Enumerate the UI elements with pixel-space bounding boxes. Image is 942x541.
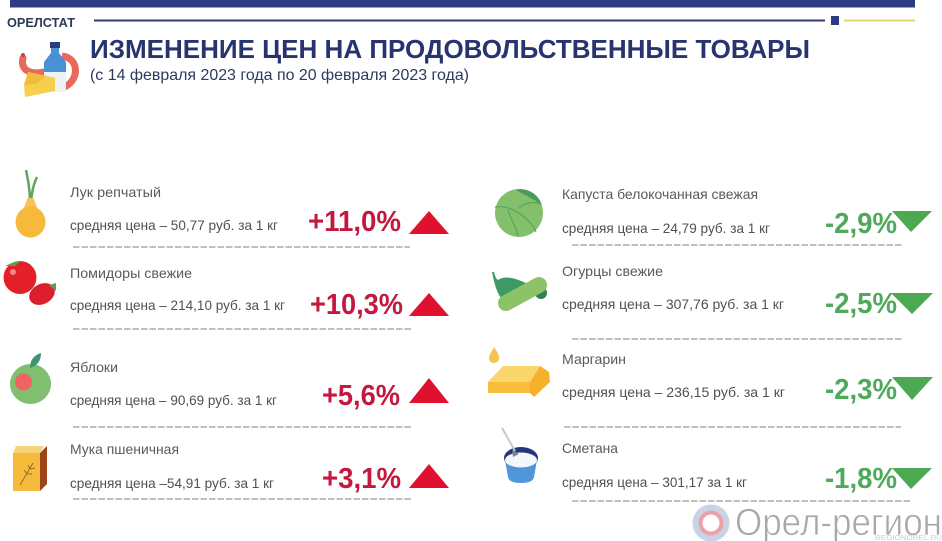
item: sour cream: [502, 428, 932, 501]
item: flour: [13, 441, 449, 499]
item: flour: +3,1%: [322, 463, 401, 495]
item: margarine: -2,3%: [825, 374, 897, 406]
arrow: down: [892, 468, 932, 489]
item: margarine: [488, 347, 933, 427]
arrow: down: [891, 293, 933, 314]
icon: food basket: [21, 42, 76, 97]
item: tomatoes: [4, 261, 449, 329]
item: onion: +11,0%: [308, 206, 401, 238]
icon: sour cream: [502, 428, 538, 483]
arrow: down: [892, 211, 932, 232]
item: cabbage: [495, 186, 932, 245]
item: flour: Мука пшеничная: [70, 441, 179, 457]
item: onion: [16, 170, 449, 247]
item: tomatoes: +10,3%: [310, 289, 403, 321]
item: sour cream: -1,8%: [825, 463, 897, 495]
item: tomatoes: Помидоры свежие: [70, 265, 192, 281]
icon: margarine: [488, 347, 550, 397]
item: margarine: средняя цена – 236,15 руб. за 1 кг: [562, 384, 785, 400]
icon: apple: [10, 353, 51, 404]
item: apples: средняя цена – 90,69 руб. за 1 кг: [70, 392, 277, 408]
item: sour cream: Сметана: [562, 440, 618, 456]
arrow: down: [892, 377, 933, 400]
icon: cucumbers: [492, 272, 547, 303]
icon: onion: [16, 170, 46, 238]
item: margarine: Маргарин: [562, 351, 626, 367]
icon: flour bag: [13, 446, 47, 491]
item: cabbage: -2,9%: [825, 208, 897, 240]
item: onion: Лук репчатый: [70, 184, 161, 200]
header band: [10, 0, 915, 8]
arrow: up: [409, 211, 449, 234]
item: cucumbers: средняя цена – 307,76 руб. за 1 кг: [562, 296, 784, 312]
item: cabbage: средняя цена – 24,79 руб. за 1 кг: [562, 220, 770, 236]
item: onion: средняя цена – 50,77 руб. за 1 кг: [70, 217, 278, 233]
item: cucumbers: [492, 263, 933, 339]
item: apples: +5,6%: [322, 380, 400, 412]
item: apples: Яблоки: [70, 359, 118, 375]
item: cucumbers: Огурцы свежие: [562, 263, 663, 279]
item: apples: [10, 353, 449, 427]
arrow: up: [409, 293, 449, 316]
header rule: [94, 16, 915, 25]
icon: watermark logo: [692, 504, 730, 541]
arrow: up: [409, 378, 449, 403]
item: flour: средняя цена –54,91 руб. за 1 кг: [70, 475, 274, 491]
subtitle: (с 14 февраля 2023 года по 20 февраля 2023 года): [90, 67, 469, 84]
title: ИЗМЕНЕНИЕ ЦЕН НА ПРОДОВОЛЬСТВЕННЫЕ ТОВАРЫ: [90, 34, 810, 64]
organisation name: ОРЕЛСТАТ: [7, 15, 75, 30]
icon: cabbage: [495, 189, 543, 237]
icon: tomatoes: [4, 261, 59, 309]
item: cucumbers: -2,5%: [825, 288, 897, 320]
item: sour cream: средняя цена – 301,17 за 1 кг: [562, 474, 747, 490]
item: cabbage: Капуста белокочанная свежая: [562, 186, 758, 202]
item: tomatoes: средняя цена – 214,10 руб. за 1 кг: [70, 297, 285, 313]
arrow: up: [409, 464, 449, 488]
